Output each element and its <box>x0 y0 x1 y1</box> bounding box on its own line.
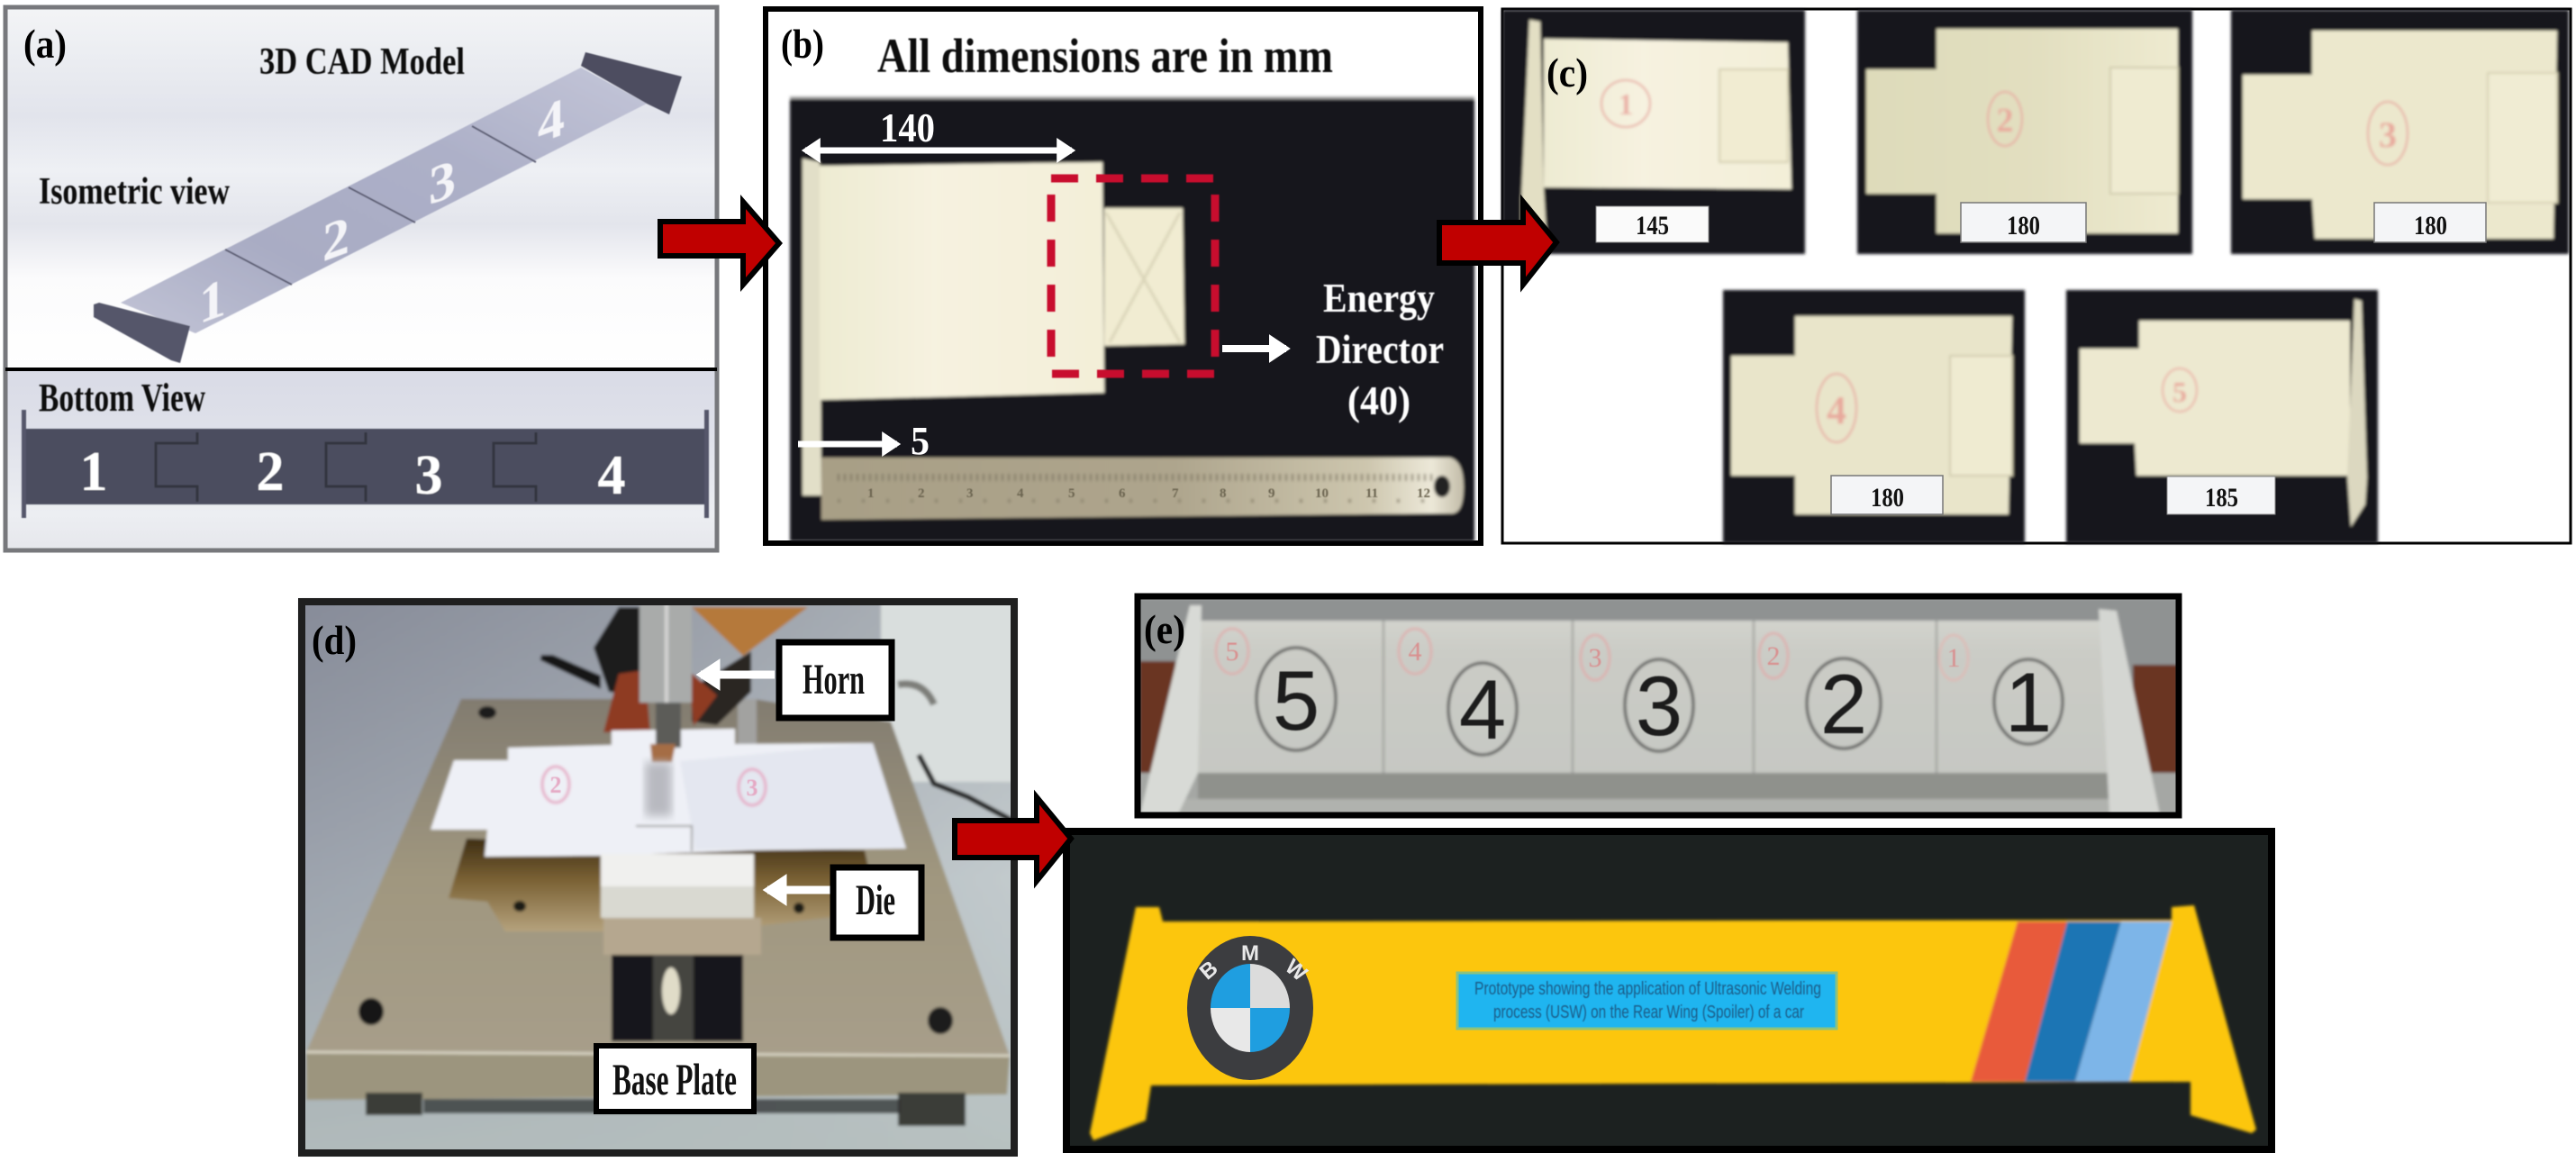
small red segment numbers: 1 <box>1947 643 1960 673</box>
segment photo 2: 2 <box>1996 102 2014 140</box>
energy director dashed box <box>1051 178 1215 374</box>
small red segment numbers: 4 <box>1409 637 1421 667</box>
isometric wing model: 3 <box>429 148 456 217</box>
label: Energy Director (40) <box>1316 275 1444 423</box>
isometric wing model: 4 <box>538 86 565 156</box>
segment photo 2: 180 <box>2007 211 2040 241</box>
handwritten segment numbers: 1 <box>2005 655 2052 749</box>
label: (c): (c) <box>1547 50 1588 95</box>
small red segment numbers <box>1225 637 1960 673</box>
callout: Base Plate: Base Plate <box>612 1054 737 1104</box>
label: Energy Director (40): (40) <box>1347 377 1410 423</box>
label: (a): (a) <box>23 21 67 67</box>
panel: (c) five wing segments <box>1502 9 2571 543</box>
blue caption label: process (USW) on the Rear Wing (Spoiler) of a car <box>1493 1003 1804 1022</box>
isometric wing model: 1 <box>199 267 226 336</box>
label: Energy Director (40): Director <box>1316 326 1444 372</box>
segment photo 5: 5 <box>2172 376 2187 408</box>
arrow: (d) to (e) <box>955 797 1071 881</box>
segment photo 3: 3 <box>2379 114 2397 155</box>
arrow: (a) to (b) <box>660 202 779 285</box>
ruler numbers <box>867 486 1430 501</box>
small red segment numbers: 5 <box>1225 637 1239 667</box>
BMW logo: W <box>1280 955 1311 986</box>
blue caption label <box>1457 973 1837 1029</box>
ruler numbers: 1 <box>867 486 874 501</box>
segment photo 3 <box>2231 10 2569 254</box>
small red segment numbers: 3 <box>1589 643 1601 673</box>
handwritten segment numbers: 5 <box>1273 653 1320 748</box>
ruler numbers: 6 <box>1119 486 1126 501</box>
ruler numbers: 9 <box>1268 486 1275 501</box>
small red segment numbers: 2 <box>1767 641 1780 671</box>
panel: (b) dimensions photo <box>766 9 1481 543</box>
BMW logo: B <box>1195 956 1222 985</box>
blue caption label: Prototype showing the application of Ultrasonic Welding <box>1474 979 1821 999</box>
BMW logo: M <box>1241 941 1259 966</box>
label: (b): (b) <box>781 21 824 67</box>
sheet circle numbers <box>549 772 758 801</box>
callout: Horn <box>701 642 892 718</box>
isometric wing model <box>94 52 682 363</box>
segment photo 5 <box>2066 290 2378 543</box>
panel: (a) 3D CAD model <box>5 7 717 550</box>
heading: 3D CAD Model: 3D CAD Model <box>259 41 465 83</box>
callout: Die <box>767 867 921 938</box>
label: Bottom View: Bottom View <box>39 376 205 420</box>
ruler numbers: 10 <box>1315 486 1329 501</box>
dark photo with part <box>790 96 1474 541</box>
segment photo 2 <box>1857 10 2192 254</box>
segment photo 3: 180 <box>2414 211 2447 241</box>
ruler numbers: 12 <box>1417 486 1430 501</box>
label: Isometric view: Isometric view <box>39 171 231 213</box>
bottom view wing bar: 2 <box>256 441 285 503</box>
ruler numbers: 2 <box>918 486 924 501</box>
arrow to energy director label <box>1222 345 1286 352</box>
sheet circle numbers: 3 <box>746 775 758 801</box>
segment photo 1: 1 <box>1618 88 1634 122</box>
bottom view wing bar: 1 <box>79 441 108 503</box>
label: (e): (e) <box>1144 606 1185 652</box>
dimension arrow: 5: 5 <box>911 419 930 463</box>
panel: finished yellow BMW wing prototype <box>1066 831 2272 1149</box>
heading: All dimensions are in mm: All dimensions are in mm <box>877 29 1333 83</box>
ruler numbers: 11 <box>1365 486 1378 501</box>
callout: Base Plate <box>596 1046 754 1112</box>
segment photo 1: 145 <box>1636 211 1669 241</box>
handwritten segment numbers: 4 <box>1459 662 1506 757</box>
dimension arrow: 140: 140 <box>880 104 935 150</box>
ruler numbers: 4 <box>1017 486 1024 501</box>
bottom view wing bar: 3 <box>414 445 443 506</box>
ruler numbers: 5 <box>1068 486 1075 501</box>
bottom view wing bar <box>22 410 709 518</box>
callout: Horn: Horn <box>803 656 865 704</box>
label: Energy Director (40): Energy <box>1323 275 1435 321</box>
BMW logo <box>1187 936 1313 1080</box>
arrow: (b) to (c) <box>1439 202 1556 285</box>
panel: (e) numbered welded wing photo <box>1138 596 2179 815</box>
panel: (d) welding setup photo <box>300 600 1016 1155</box>
ruler numbers: 7 <box>1172 486 1179 501</box>
ruler numbers: 8 <box>1220 486 1227 501</box>
isometric wing model: 2 <box>322 204 349 274</box>
label: (d): (d) <box>312 617 357 663</box>
segment photo 4: 180 <box>1871 483 1904 513</box>
handwritten segment numbers: 2 <box>1820 657 1867 751</box>
segment photo 1 <box>1502 10 1805 254</box>
handwritten segment numbers: 3 <box>1636 658 1683 753</box>
handwritten segment numbers <box>1273 653 2052 757</box>
sheet circle numbers: 2 <box>549 772 562 798</box>
segment photo 5: 185 <box>2205 483 2238 513</box>
bottom view wing bar: 4 <box>598 445 625 506</box>
yellow wing <box>1090 905 2256 1140</box>
segment photo 4: 4 <box>1827 388 1846 432</box>
segment photo 4 <box>1723 290 2025 543</box>
ruler numbers: 3 <box>966 486 973 501</box>
callout: Die: Die <box>856 876 895 924</box>
